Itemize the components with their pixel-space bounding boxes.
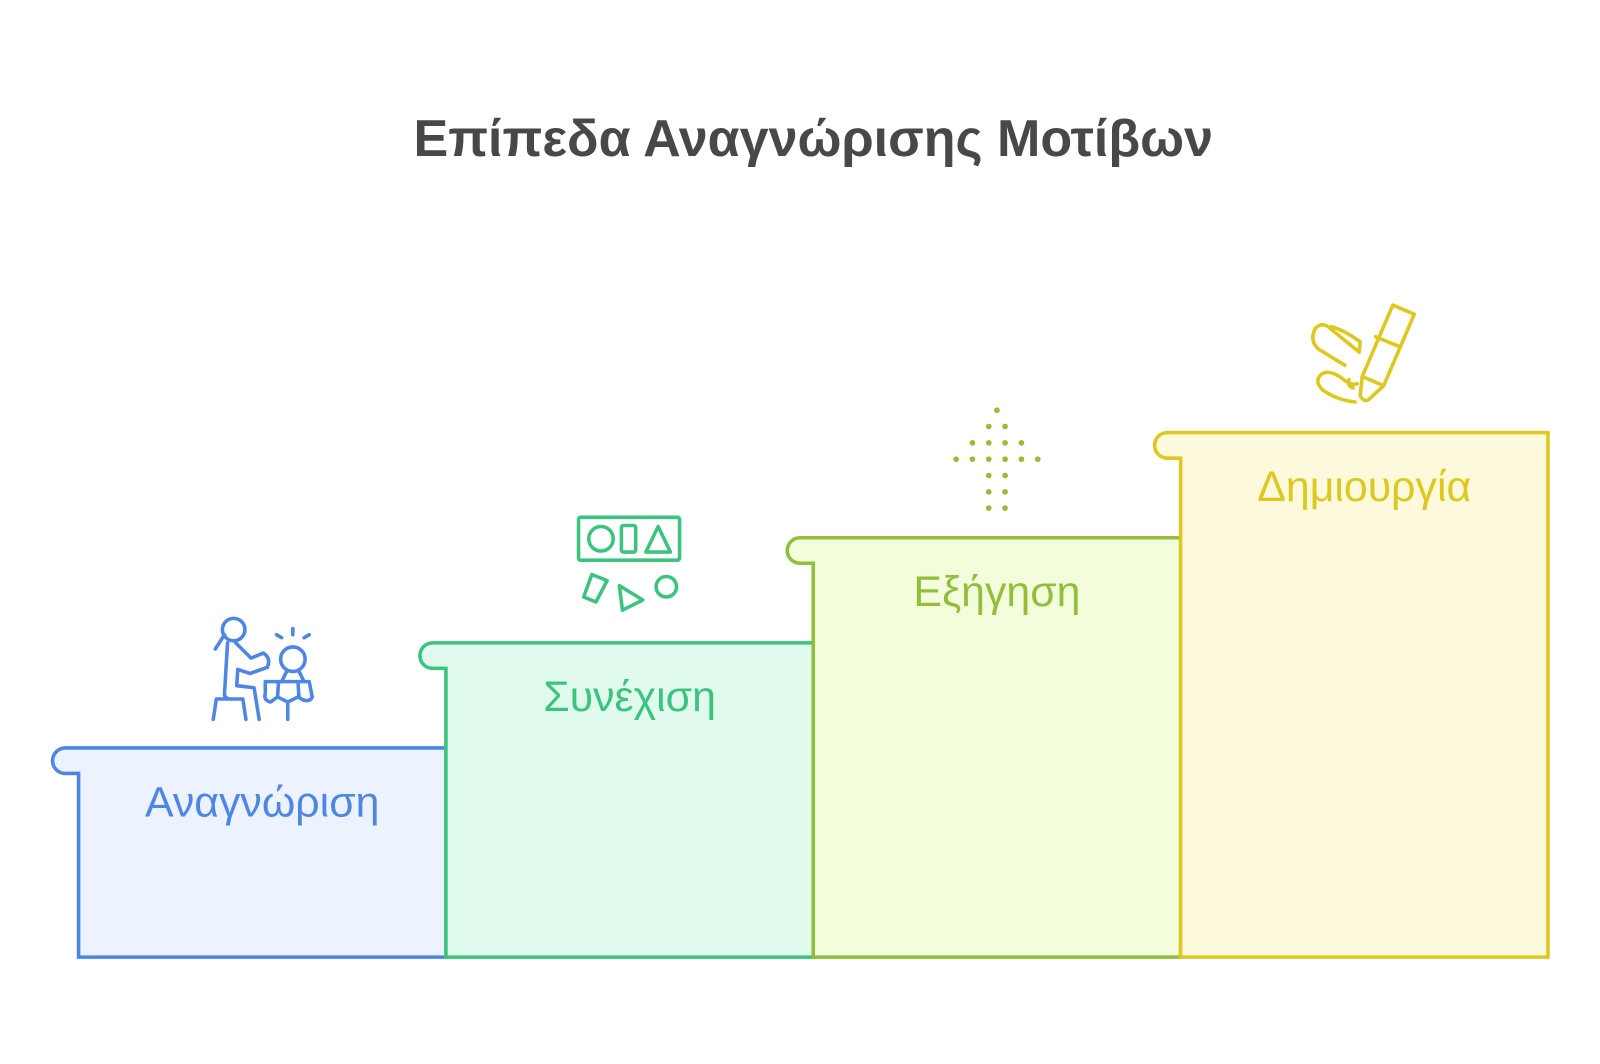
label: Δημιουργία: Δημιουργία	[1257, 463, 1471, 511]
step 1: Αναγνώριση	[53, 748, 446, 957]
label: Αναγνώριση: Αναγνώριση	[145, 778, 379, 826]
icon: shapes	[579, 517, 680, 610]
step 4: Δημιουργία	[1155, 433, 1548, 957]
icon: dotted up arrow	[953, 407, 1041, 511]
label: Συνέχιση: Συνέχιση	[543, 673, 716, 721]
step 3: Εξήγηση	[787, 538, 1181, 957]
title: Επίπεδα Αναγνώρισης Μοτίβων	[413, 110, 1213, 168]
icon: teacher and child	[213, 618, 312, 719]
label: Εξήγηση: Εξήγηση	[913, 568, 1080, 616]
step 2: Συνέχιση	[420, 643, 813, 957]
icon: pencil drawing	[1313, 305, 1414, 402]
